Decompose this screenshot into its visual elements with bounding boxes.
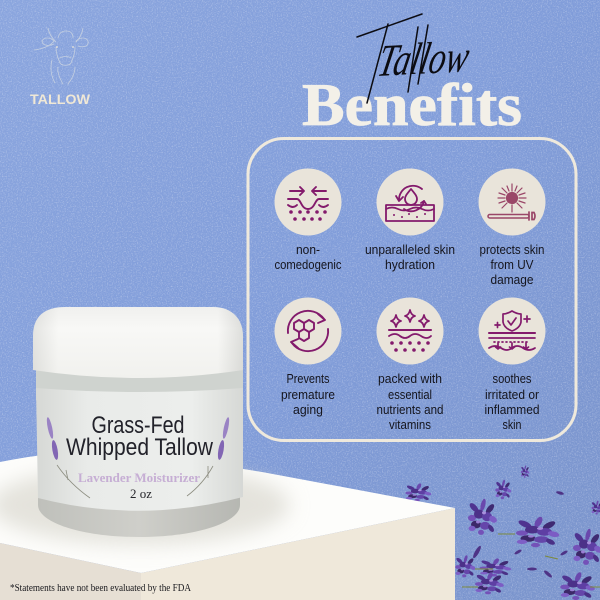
benefit: skin hydration: hydration (385, 257, 435, 272)
benefit: nutrients and vitamins: vitamins (389, 417, 431, 432)
benefit: prevents premature aging (274, 298, 342, 417)
pedestal (0, 449, 455, 600)
jar (33, 307, 243, 537)
jar base (38, 490, 240, 537)
jar lid (33, 307, 243, 378)
jar neck (36, 370, 243, 400)
jar label: Lavender Moisturizer (78, 470, 200, 485)
jar label: Whipped Tallow (66, 434, 213, 461)
benefit: soothes irritated skin: soothes (492, 371, 532, 386)
benefit: soothes irritated skin: inflammed (484, 402, 540, 417)
benefit: non-comedogenic (274, 168, 342, 272)
benefit: soothes irritated skin: irritated or (485, 387, 540, 402)
benefit: soothes irritated skin (478, 298, 546, 432)
jar label: 2 oz (130, 486, 152, 501)
FDA disclaimer: *Statements have not been evaluated by the FDA (10, 583, 192, 594)
benefit: nutrients and vitamins: packed with (378, 371, 442, 386)
benefit: prevents premature aging: Prevents (286, 371, 330, 386)
benefit: non-comedogenic: comedogenic (274, 257, 342, 272)
label sprigs (46, 417, 230, 498)
title: Benefits: Benefits (302, 72, 522, 138)
benefit: skin hydration (365, 168, 455, 272)
benefit: UV protection: protects skin (480, 242, 544, 257)
benefit: prevents premature aging: aging (293, 402, 323, 417)
benefit: skin hydration: unparalleled skin (365, 242, 455, 257)
logo: cow head and wordmark: TALLOW (30, 91, 91, 107)
benefit: nutrients and vitamins: nutrients and (376, 402, 444, 417)
benefit: UV protection: from UV (490, 257, 534, 272)
title: Tallow script (357, 14, 474, 103)
benefit: soothes irritated skin: skin (502, 417, 522, 432)
benefit: UV protection: damage (490, 272, 534, 287)
benefit: prevents premature aging: premature (281, 387, 335, 402)
logo: cow head and wordmark (30, 28, 91, 107)
benefit: nutrients and vitamins (376, 298, 444, 432)
jar label (36, 388, 243, 511)
benefit: UV protection (478, 168, 546, 287)
panel: benefits (248, 138, 576, 440)
benefit: non-comedogenic: non- (296, 242, 320, 257)
benefit: nutrients and vitamins: essential (388, 387, 432, 402)
title: Tallow script: Tallow (374, 32, 474, 86)
lavender flowers (405, 465, 600, 600)
jar label: Grass-Fed (92, 412, 184, 439)
